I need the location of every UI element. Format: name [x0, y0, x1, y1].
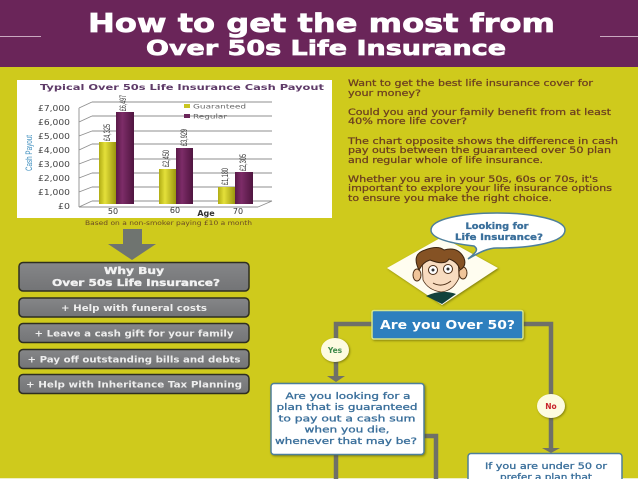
arrowheads	[327, 376, 560, 453]
badge: no: No	[545, 402, 557, 411]
bar value labels: £4,325	[102, 124, 112, 141]
intro text block: your money?	[348, 89, 421, 99]
y axis title: Cash Payout	[24, 135, 34, 171]
title: How to get the most from	[88, 9, 555, 39]
hair	[416, 248, 465, 270]
legend	[184, 102, 246, 120]
question box: guaranteed plan: whenever that may be?	[275, 437, 417, 447]
list item	[19, 298, 249, 317]
legend: Regular	[193, 112, 227, 120]
bars	[99, 112, 253, 204]
y axis labels: £0	[58, 202, 70, 211]
bar value labels: £6,497	[118, 95, 128, 111]
heading button: Why Buy	[104, 266, 165, 277]
x axis labels: 60	[170, 206, 180, 215]
list item: + Help with funeral costs	[61, 304, 207, 314]
mouth	[433, 281, 451, 285]
question box: guaranteed plan	[271, 384, 424, 454]
list item: + Pay off outstanding bills and debts	[28, 356, 240, 366]
list item	[19, 324, 249, 342]
list item: + Help with Inheritance Tax Planning	[26, 380, 242, 390]
list item	[19, 350, 249, 368]
y axis labels	[38, 104, 70, 211]
intro text block: 40% more life cover?	[348, 117, 467, 127]
question box: guaranteed plan: Are you looking for a	[286, 392, 410, 402]
panel: why buy list	[19, 262, 249, 394]
flow connectors	[336, 324, 551, 479]
bottom edge	[0, 478, 638, 479]
intro text block: pay outs between the guaranteed over 50 plan	[348, 146, 611, 156]
badge: yes	[321, 338, 349, 362]
badge: yes: Yes	[327, 346, 343, 355]
y axis labels: £7,000	[38, 104, 70, 113]
face	[422, 258, 459, 292]
list item: + Leave a cash gift for your family	[34, 330, 234, 340]
y axis labels: £5,000	[38, 132, 70, 141]
heading button	[19, 262, 249, 291]
arrow down	[108, 229, 156, 260]
y axis labels: £1,000	[38, 188, 70, 197]
icon: man in diamond	[387, 237, 498, 305]
intro text block	[347, 79, 618, 204]
chart grid	[79, 102, 272, 207]
title: Over 50s Life Insurance	[146, 36, 506, 60]
title	[88, 9, 555, 60]
bar value labels	[102, 95, 248, 185]
bar value labels: £3,929	[179, 129, 189, 146]
intro text block: and regular whole of life insurance.	[348, 156, 543, 166]
panel: cash payout chart	[17, 80, 332, 218]
legend: Guaranteed	[193, 102, 246, 110]
bar value labels: £2,450	[161, 150, 171, 167]
y axis labels: £3,000	[38, 160, 70, 169]
eyes	[428, 266, 438, 274]
chart footnote: Based on a non-smoker paying £10 a month	[85, 220, 252, 227]
speech bubble: Looking for	[466, 222, 529, 232]
x axis labels: 50	[108, 207, 118, 216]
intro text block: Want to get the best life insurance cover for	[348, 79, 594, 89]
badge: no	[537, 394, 565, 418]
list item	[19, 374, 249, 394]
y axis labels: £2,000	[38, 174, 70, 183]
speech bubble: Life Insurance?	[455, 233, 543, 243]
bar value labels: £2,305	[238, 154, 248, 171]
question box: guaranteed plan: when you die,	[304, 426, 390, 436]
intro text block: to ensure you make the right choice.	[348, 194, 552, 204]
question box: guaranteed plan: to pay out a cash sum	[278, 414, 416, 424]
heading button: Over 50s Life Insurance?	[52, 278, 220, 289]
x axis labels: Age	[197, 209, 215, 218]
x axis labels: 70	[233, 207, 243, 216]
y axis labels: £6,000	[38, 118, 70, 127]
bar value labels: £1,180	[220, 168, 230, 185]
decision: are you over 50	[372, 310, 523, 339]
chart title: Typical Over 50s Life Insurance Cash Payout	[40, 83, 324, 92]
question box: under 50	[468, 454, 622, 479]
intro text block: Whether you are in your 50s, 60s or 70s, it's	[348, 175, 599, 185]
intro text block: The chart opposite shows the difference in cash	[347, 137, 618, 147]
decision: are you over 50: Are you Over 50?	[380, 318, 515, 332]
y axis labels: £4,000	[38, 146, 70, 155]
speech bubble	[431, 213, 565, 259]
header banner	[0, 0, 638, 67]
intro text block: important to explore your life insurance options	[348, 184, 613, 194]
question box: guaranteed plan: plan that is guaranteed	[276, 403, 418, 413]
question box: under 50: If you are under 50 or	[485, 462, 608, 472]
ears	[413, 269, 421, 281]
intro text block: Could you and your family benefit from at least	[348, 108, 612, 118]
x axis labels	[108, 206, 243, 218]
